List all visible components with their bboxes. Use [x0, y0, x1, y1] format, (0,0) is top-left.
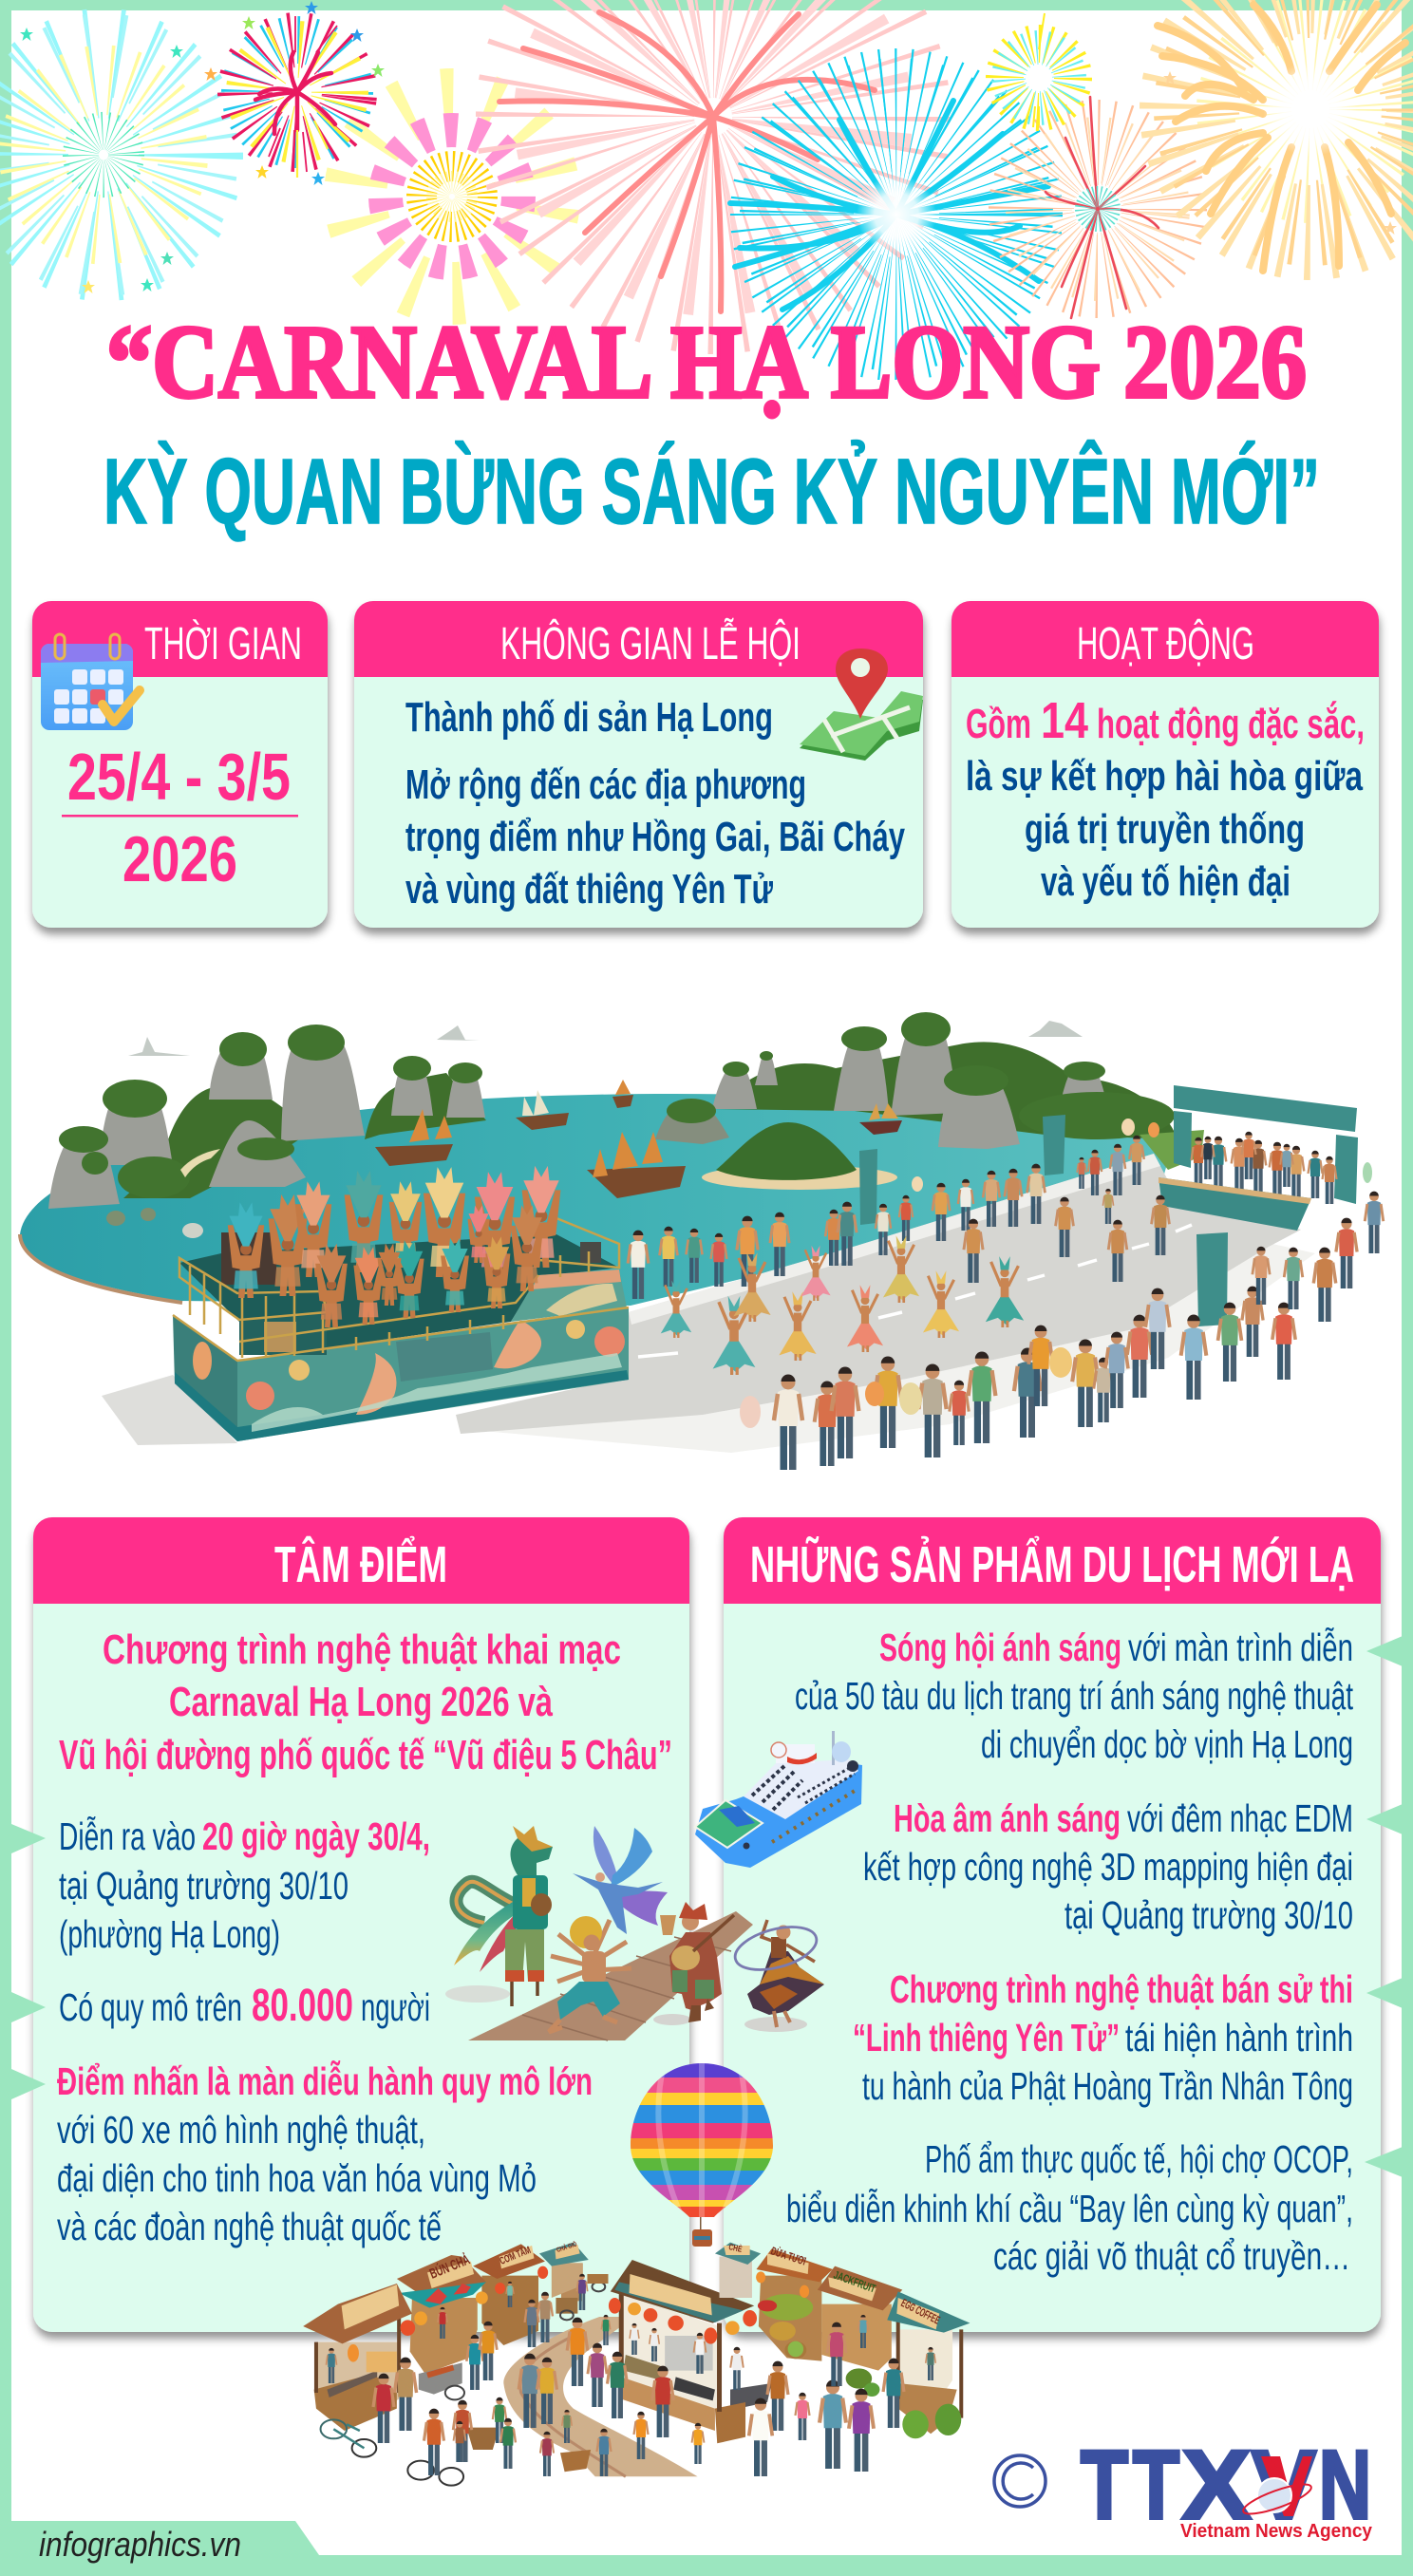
distant islets [128, 1021, 1083, 1056]
stall signs: JACKFRUIT [832, 2268, 877, 2296]
panel heading: thời gian: THỜI GIAN [144, 618, 302, 669]
green islet [702, 1122, 897, 1190]
programme details [57, 1814, 593, 2248]
panel: tâm điểm [33, 1517, 689, 2332]
panel: không gian lễ hội [354, 601, 923, 928]
bullet markers [11, 1636, 1403, 2177]
programme details: Điểm nhấn là màn diễu hành quy mô lớn [57, 2059, 593, 2103]
stall signs: EGG COFFEE [899, 2296, 942, 2327]
stall: central [611, 2260, 772, 2443]
icon: calendar [41, 634, 140, 730]
logo: TTXVN: T [1133, 2431, 1179, 2539]
agency name: Vietnam News Agency [1180, 2521, 1373, 2542]
panel heading: hoạt động: HOẠT ĐỘNG [1077, 618, 1254, 669]
musician performer [653, 1902, 734, 2025]
stall: right side [715, 2243, 970, 2438]
tourism products list: Sóng hội ánh sáng [879, 1626, 1121, 1669]
market carpet path [503, 2317, 698, 2476]
parade float [173, 1218, 629, 1441]
programme details: với 60 xe mô hình nghệ thuật, [57, 2108, 425, 2152]
location text: và vùng đất thiêng Yên Tử [405, 866, 773, 912]
location text: trọng điểm như Hồng Gai, Bãi Cháy [405, 814, 905, 860]
logo: TTXVN: V [1252, 2431, 1316, 2539]
tourism products list: Hòa âm ánh sáng [894, 1796, 1121, 1840]
stall: left stalls [303, 2243, 608, 2486]
programme details: Có quy mô trên [59, 1985, 242, 2029]
programme details: đại diện cho tinh hoa văn hóa vùng Mỏ [57, 2156, 537, 2200]
illustration: carnival performers [445, 1826, 824, 2040]
date range: 25/4 - 3/5 [67, 740, 291, 814]
float shadow [102, 1375, 237, 1445]
left karst islands [48, 1025, 486, 1238]
hoop dancer [730, 1919, 824, 2032]
programme details: (phường Hạ Long) [59, 1912, 280, 1956]
footer text: website: infographics.vn [39, 2525, 241, 2564]
programme details: và các đoàn nghệ thuật quốc tế [57, 2205, 442, 2248]
dining tables [466, 2428, 499, 2450]
dragon stilt performer [454, 1826, 553, 2006]
fireworks banner [0, 0, 1413, 321]
opening programme title: Vũ hội đường phố quốc tế “Vũ điệu 5 Châu” [59, 1732, 672, 1778]
firework: golden [1158, 0, 1413, 271]
stall signs: BÚN CHẢ [427, 2250, 472, 2283]
logo: TTXVN: T [1081, 2431, 1128, 2539]
activities text: và yếu tố hiện đại [1041, 858, 1291, 905]
firework: pink and yellow [346, 90, 558, 303]
illustration: cruise ship [695, 1731, 862, 1868]
crowd: front line [774, 1192, 1384, 1470]
programme details: người [361, 1985, 430, 2029]
firework: large salmon [499, 0, 875, 311]
footer tab [11, 2521, 319, 2559]
firework: cyan and yellow [0, 41, 212, 269]
activities highlight [966, 692, 1365, 749]
illustration: Ha Long bay carnival parade [20, 1012, 1384, 1470]
panel heading: không gian lễ hội: KHÔNG GIAN LỄ HỘI [500, 618, 801, 669]
decorative stars [20, 1, 1397, 293]
stage arch and banners [859, 1085, 1358, 1326]
stall signs: CƠM TẤM [498, 2244, 533, 2267]
stall signs [427, 2239, 942, 2327]
lanterns [348, 2266, 809, 2362]
firework: orange and red [1031, 97, 1164, 318]
winged fairy performer [573, 1826, 668, 1934]
market people [326, 2274, 935, 2476]
logo: TTXVN: N [1319, 2431, 1371, 2539]
location text [405, 694, 905, 912]
bay water [20, 1094, 1173, 1306]
programme details: Diễn ra vào [59, 1814, 196, 1858]
stall signs: DỪA TƯƠI [769, 2244, 808, 2268]
year: 2026 [122, 823, 237, 895]
logo: TTXVN: X [1182, 2431, 1251, 2539]
panel heading: tâm điểm: TÂM ĐIỂM [274, 1535, 447, 1593]
panel: thời gian [32, 601, 328, 928]
copyright symbol [994, 2455, 1046, 2507]
tourism products list [786, 1626, 1353, 2278]
junk boats [375, 1080, 902, 1198]
float decoration [193, 1284, 625, 1432]
right karst islands [655, 1012, 1204, 1170]
opening programme title: Chương trình nghệ thuật khai mạc [103, 1626, 621, 1673]
location text: Mở rộng đến các địa phương [405, 762, 806, 808]
illustration: food market [303, 2239, 970, 2486]
logo: TTXVN [1081, 2431, 1373, 2542]
float dancers [228, 1166, 560, 1327]
activities text: giá trị truyền thống [1025, 806, 1305, 853]
location text: Thành phố di sản Hạ Long [405, 694, 773, 741]
firework: red multicolour [239, 16, 355, 178]
opening programme title: Carnaval Hạ Long 2026 và [169, 1679, 553, 1725]
stage counter [1159, 1177, 1311, 1231]
activities highlight: Gồm [966, 701, 1031, 747]
activities highlight: 14 [1041, 692, 1088, 749]
brick parade path [468, 1911, 753, 2040]
stall signs: CHÈ [728, 2242, 743, 2254]
tourism products list: “Linh thiêng Yên Tử” [853, 2016, 1120, 2059]
road dancers [661, 1235, 1024, 1375]
stage audience [1191, 1132, 1337, 1204]
illustration: hot air balloon [627, 2060, 779, 2247]
multi-armed dancer [549, 1916, 631, 2032]
panel: hoạt động [951, 601, 1379, 928]
programme details: tại Quảng trường 30/10 [59, 1864, 349, 1908]
small rocks in water [106, 1211, 125, 1226]
firework: small yellow [1003, 13, 1075, 127]
stall signs: CHẢ GIÒ [556, 2239, 578, 2254]
opening programme title [59, 1626, 672, 1778]
activities text [966, 753, 1363, 905]
firework: bright cyan [730, 101, 1048, 321]
programme details: 20 giờ ngày 30/4, [202, 1814, 430, 1858]
lanterns in crowd [740, 1119, 1372, 1428]
programme details: 80.000 [252, 1981, 353, 2031]
parade road [461, 1244, 1315, 1453]
crowd: back line [628, 1136, 1169, 1299]
icon: map pin [800, 649, 923, 761]
float railings [173, 1218, 629, 1361]
panel: những sản phẩm du lịch mới lạ [724, 1517, 1381, 2332]
